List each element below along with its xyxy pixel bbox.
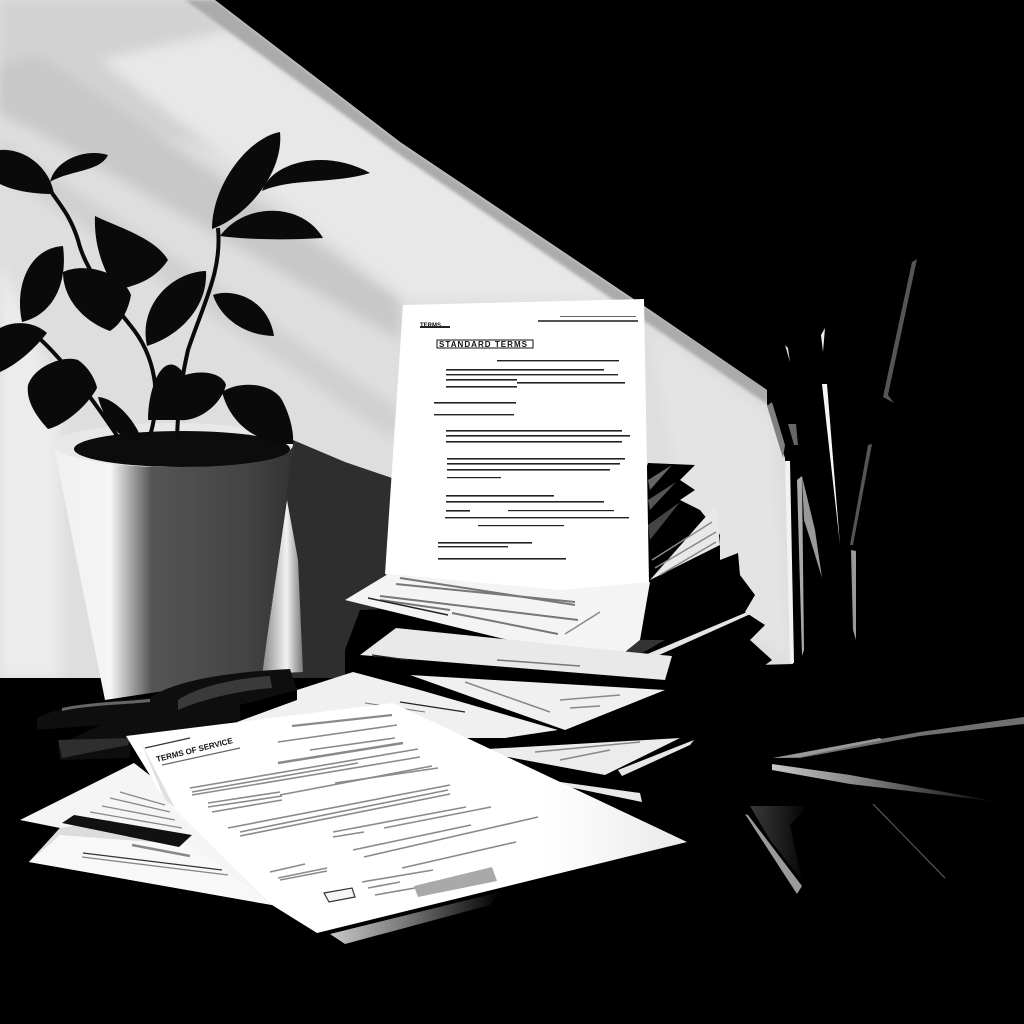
sliver sheet xyxy=(510,775,642,802)
sheet heading: TERMS OF SERVICE xyxy=(155,736,234,764)
back stack of dark sheets xyxy=(345,463,780,800)
page title: STANDARD TERMS xyxy=(439,340,528,349)
flat sheet on stack xyxy=(345,574,665,664)
desk surface xyxy=(0,678,1024,1024)
left desk sheet xyxy=(20,763,272,905)
page body lines xyxy=(434,360,630,560)
reflected light strip beside pot xyxy=(262,500,303,674)
icon: pencil cup xyxy=(767,259,917,663)
back desk sheet xyxy=(237,672,558,745)
page header: TERMS xyxy=(420,323,441,329)
icon: tablet xyxy=(772,717,1024,802)
fanned white sheets xyxy=(650,505,720,580)
grey signature block xyxy=(414,867,497,897)
stamp box xyxy=(324,888,355,902)
sheet body lines xyxy=(190,715,538,895)
main foreground sheet xyxy=(126,703,687,944)
fourth sheet in stack xyxy=(470,738,694,776)
icon: plant pot xyxy=(53,423,293,700)
icon: stapler xyxy=(37,669,297,760)
pot shadow on wall xyxy=(262,440,398,678)
wall lit by window light xyxy=(0,0,800,680)
black band xyxy=(62,815,192,847)
third sheet in stack xyxy=(410,675,665,730)
icon: plant silhouette xyxy=(0,132,370,444)
leaves xyxy=(0,150,54,194)
upright letter page xyxy=(385,299,649,640)
icon: phone xyxy=(745,804,945,894)
plant stems xyxy=(30,190,219,440)
second sheet in stack xyxy=(360,628,672,680)
